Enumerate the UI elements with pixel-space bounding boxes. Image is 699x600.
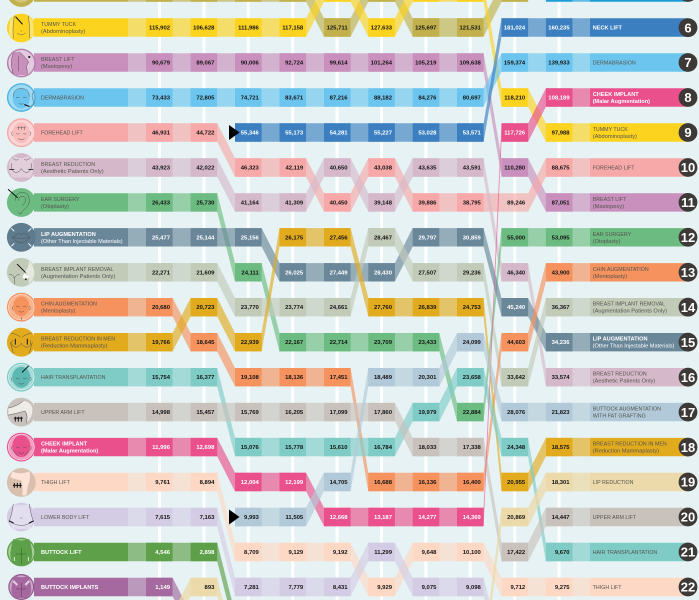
series: forehead lift: 89,246: [507, 200, 526, 206]
series: lip reduction: 893: [205, 585, 215, 591]
series: buttock augmentation with fat grafting: [229, 333, 688, 526]
series: chin augmentation: [7, 263, 688, 491]
series: breast lift: 110,280: [504, 166, 526, 172]
series: buttock augmentation with fat grafting: 24,099: [463, 340, 482, 346]
rank badges: 20: [681, 510, 695, 525]
series: buttock lift: 2,898: [200, 550, 215, 556]
series: lower body lift: 9,098: [466, 585, 482, 591]
series: forehead lift: 39,886: [418, 200, 437, 206]
series: thigh lift: [7, 468, 688, 596]
series: lower body lift: 7,281: [244, 585, 260, 591]
series: tummy tuck: 106,628: [193, 26, 215, 32]
series: dermabrasion: 139,933: [548, 60, 570, 66]
series: ear surgery: 25,730: [196, 200, 215, 206]
series: rank 5 blue label: [546, 0, 688, 2]
icon: face with dermabrasion tool: [7, 83, 36, 112]
rank badges: 18: [681, 440, 695, 455]
right label: buttock augmentation: BUTTOCK AUGMENTATION: [593, 407, 661, 413]
rank badges: [679, 0, 697, 596]
series: breast implant removal: 36,367: [552, 305, 570, 311]
right label: hair transplantation: HAIR TRANSPLANTATION: [593, 550, 657, 556]
series: breast reduction in men: 20,723: [196, 305, 215, 311]
series: dermabrasion: 83,671: [285, 96, 304, 102]
series: buttock augmentation with fat grafting: 20,301: [418, 375, 437, 381]
right label: neck lift: NECK LIFT: [593, 26, 622, 32]
series: lip augmentation: 28,430: [374, 270, 393, 276]
series: buttock implants: [8, 574, 184, 600]
right label: upper arm lift: UPPER ARM LIFT: [593, 515, 637, 521]
right label: cheek implant: (Malar Augmentation): [593, 99, 650, 105]
series: breast lift: 90,679: [152, 60, 171, 66]
series: lip augmentation: 26,025: [285, 270, 304, 276]
right label: chin augmentation: CHIN AUGMENTATION: [593, 267, 649, 273]
series: chin augmentation: 16,400: [463, 480, 482, 486]
series: breast reduction: 43,635: [418, 166, 437, 172]
series: dermabrasion: 87,216: [330, 96, 348, 102]
series: breast implant removal: 29,236: [463, 270, 482, 276]
series: cheek implant: 117,726: [504, 130, 526, 136]
rank badges: 10: [681, 160, 695, 175]
label: cheek implant: CHEEK IMPLANT: [41, 442, 88, 448]
label: lip augmentation: LIP AUGMENTATION: [41, 232, 96, 238]
series: upper arm lift: 15,457: [196, 410, 215, 416]
rank badges: 13: [681, 265, 695, 280]
icon: male chest: [7, 328, 36, 357]
series: tummy tuck: 111,986: [238, 26, 260, 32]
series: upper arm lift: 17,422: [507, 550, 526, 556]
series: lip augmentation: 45,240: [507, 305, 526, 311]
series: cheek implant: 14,277: [418, 515, 437, 521]
series: buttock augmentation with fat grafting: 18,489: [374, 375, 393, 381]
series: lip augmentation: 29,797: [418, 235, 437, 241]
series: hair transplantation: 23,658: [463, 375, 482, 381]
series: cheek implant: 12,698: [196, 445, 215, 451]
series: hair transplantation: [7, 363, 688, 561]
series: upper arm lift: 17,099: [330, 410, 348, 416]
series: lip reduction: [179, 473, 688, 600]
marker: new entry triangle: [229, 510, 240, 524]
series: lower body lift: 7,779: [288, 585, 304, 591]
series: dermabrasion: 73,433: [152, 96, 171, 102]
series: cheek implant: 11,996: [152, 445, 171, 451]
series: rank 5 olive procedure: 125,697: [415, 26, 437, 32]
label: ear surgery: (Otoplasty): [41, 204, 69, 210]
series: ear surgery: 22,884: [463, 410, 482, 416]
series: upper arm lift: 17,860: [374, 410, 393, 416]
series: chin augmentation: 19,108: [241, 375, 260, 381]
series: thigh lift: 8,894: [200, 480, 215, 486]
series: thigh lift: 10,100: [463, 550, 482, 556]
series: ear surgery: 23,709: [374, 340, 393, 346]
series: neck lift: 55,346: [241, 130, 260, 136]
series: cheek implant: 13,187: [374, 515, 393, 521]
series: hair transplantation: 15,610: [330, 445, 348, 451]
series: thigh lift: 9,192: [333, 550, 348, 556]
series: ear surgery: 53,095: [552, 235, 570, 241]
series: hair transplantation: 15,076: [241, 445, 260, 451]
label: buttock implants: BUTTOCK IMPLANTS: [41, 585, 99, 591]
rank badges: 6: [684, 20, 692, 35]
right label: tummy tuck: (Abdominoplasty): [593, 134, 637, 140]
series: chin augmentation: 18,136: [285, 375, 304, 381]
icon: ear with needle: [7, 188, 36, 217]
series: dermabrasion: 84,276: [418, 96, 437, 102]
series: breast reduction in men: [7, 228, 688, 491]
series: rank 5 olive procedure: 121,531: [460, 26, 482, 32]
series: ear surgery: 24,111: [241, 270, 260, 276]
series: chin augmentation: 43,900: [552, 270, 570, 276]
series: tummy tuck: 118,210: [504, 96, 526, 102]
series: breast reduction in men: 22,939: [241, 340, 260, 346]
label: breast implant removal: BREAST IMPLANT REMOVAL: [41, 267, 113, 273]
series: breast implant removal: 27,507: [418, 270, 437, 276]
series: lower body lift: 11,299: [374, 550, 393, 556]
series: cheek implant: [7, 88, 688, 526]
series: hair transplantation: 15,778: [285, 445, 304, 451]
label: breast implant removal: (Augmentation Patients Only): [41, 274, 115, 280]
series: dermabrasion: 88,182: [374, 96, 393, 102]
icon: torso with incision: [7, 14, 36, 42]
series: lip augmentation: 34,236: [552, 340, 570, 346]
series: upper arm lift: 16,205: [285, 410, 304, 416]
icon: lips with arrows: [7, 223, 36, 252]
right label: lip reduction: LIP REDUCTION: [593, 480, 634, 486]
series: breast implant removal: 33,642: [507, 375, 526, 381]
label: upper arm lift: UPPER ARM LIFT: [41, 410, 85, 416]
label: tummy tuck: (Abdominoplasty): [41, 29, 85, 35]
series: forehead lift: 88,675: [552, 166, 570, 172]
series: chin augmentation: 20,680: [152, 305, 171, 311]
series: hair transplantation: 15,754: [152, 375, 171, 381]
series: neck lift: 55,227: [374, 130, 393, 136]
series: neck lift: 53,028: [418, 130, 437, 136]
right label: buttock augmentation: WITH FAT GRAFTING: [593, 414, 646, 420]
right label: ear surgery: EAR SURGERY: [593, 232, 632, 238]
icon: chest with reduction marks: [7, 153, 36, 182]
series: hair transplantation: 16,784: [374, 445, 393, 451]
series: upper arm lift: [7, 398, 688, 561]
series: breast implant removal: 22,271: [152, 270, 171, 276]
right label: breast implant removal: (Augmentation Patients Only): [593, 309, 667, 315]
series: neck lift: 181,024: [504, 26, 526, 32]
series: upper arm lift: 18,033: [418, 445, 437, 451]
series: cheek implant: 12,199: [285, 480, 304, 486]
series: breast implant removal: 28,467: [374, 235, 393, 241]
series: lip reduction: 20,869: [507, 515, 526, 521]
series: upper arm lift: 15,769: [241, 410, 260, 416]
series: forehead lift: 42,119: [285, 166, 304, 172]
series: thigh lift: 9,929: [377, 585, 393, 591]
label: dermabrasion: DERMABRASION: [41, 96, 84, 102]
series: thigh lift: 9,761: [155, 480, 171, 486]
label: buttock lift: BUTTOCK LIFT: [41, 550, 82, 556]
right label: breast lift: BREAST LIFT: [593, 197, 627, 203]
series: neck lift: 55,173: [285, 130, 304, 136]
series: ear surgery: 22,167: [285, 340, 304, 346]
series: neck lift: 160,235: [548, 26, 570, 32]
label: breast reduction in men: (Reduction Mammaplasty): [41, 344, 107, 350]
series: neck lift: 54,281: [330, 130, 348, 136]
series: lower body lift: 9,075: [422, 585, 437, 591]
right label: breast lift: (Mastopexy): [593, 204, 624, 210]
series: breast lift: 90,006: [241, 60, 260, 66]
icon: upper arm: [7, 398, 36, 426]
icon: buttock implants: [8, 574, 34, 600]
label: lip augmentation: (Other Than Injectable Materials): [41, 239, 123, 245]
series: rank 5 olive procedure: [7, 0, 528, 37]
right label: forehead lift: FOREHEAD LIFT: [593, 166, 635, 172]
right label: dermabrasion: DERMABRASION: [593, 60, 636, 66]
series: breast reduction: 42,022: [196, 166, 215, 172]
series: hair transplantation: 16,377: [196, 375, 215, 381]
label: thigh lift: THIGH LIFT: [41, 480, 71, 486]
series: breast lift: 101,264: [371, 60, 393, 66]
series: breast reduction in men: 18,575: [552, 445, 570, 451]
right label: breast reduction: (Aesthetic Patients Only): [593, 379, 655, 385]
series: ear surgery: [7, 188, 688, 421]
series: thigh lift: 9,648: [422, 550, 437, 556]
series: breast implant removal: 23,774: [285, 305, 304, 311]
right label: breast implant removal: BREAST IMPLANT REMOVAL: [593, 302, 665, 308]
series: lower body lift: [7, 503, 489, 600]
series: rank 5 olive procedure: 125,711: [327, 26, 348, 32]
series: thigh lift: 9,275: [555, 585, 570, 591]
rank badges: 15: [681, 335, 695, 350]
right label: lip augmentation: LIP AUGMENTATION: [593, 337, 647, 343]
label: tummy tuck: TUMMY TUCK: [41, 22, 77, 28]
series: chin augmentation: 16,136: [418, 480, 437, 486]
series: tummy tuck: [7, 0, 688, 142]
icon: implant removal: [7, 258, 36, 287]
series: breast reduction: [7, 153, 688, 386]
label: breast reduction in men: BREAST REDUCTION IN MEN: [41, 337, 115, 343]
series: lip augmentation: 30,859: [463, 235, 482, 241]
right label: lip augmentation: (Other Than Injectable Materials): [593, 344, 675, 350]
series: breast reduction: 43,923: [152, 166, 171, 172]
series: cheek implant: 12,004: [241, 480, 260, 486]
icon: face with cheek marks: [7, 433, 36, 462]
series: breast reduction: 41,309: [285, 200, 304, 206]
series: breast reduction: 39,148: [374, 200, 393, 206]
label: chin augmentation: (Mentoplasty): [41, 309, 76, 315]
series: breast reduction: 40,650: [330, 166, 348, 172]
series: lip augmentation: 25,144: [196, 235, 215, 241]
series: tummy tuck: 117,158: [282, 26, 304, 32]
series: breast implant removal: 21,609: [196, 270, 215, 276]
series: breast lift: 109,638: [460, 60, 482, 66]
series: breast reduction in men: 27,760: [374, 305, 393, 311]
series: breast reduction in men: 19,766: [152, 340, 171, 346]
series: buttock augmentation with fat grafting: 28,076: [507, 410, 526, 416]
marker: new entry triangle: [229, 125, 240, 140]
series: breast reduction: 33,574: [552, 375, 570, 381]
series: thigh lift: 8,709: [244, 550, 260, 556]
series: chin augmentation: 17,451: [330, 375, 348, 381]
series: lip augmentation: 25,477: [152, 235, 171, 241]
series: breast reduction in men: 20,955: [507, 480, 526, 486]
series: breast implant removal: 23,770: [241, 305, 260, 311]
rank badges: 14: [681, 300, 696, 315]
series: hair transplantation: 19,979: [418, 410, 437, 416]
series: lower body lift: 7,163: [200, 515, 215, 521]
icon: face with hair graft needle: [7, 363, 36, 392]
series: hair transplantation: 9,670: [555, 550, 570, 556]
series: ear surgery: 55,000: [507, 235, 526, 241]
right label: breast reduction in men: BREAST REDUCTION IN MEN: [593, 442, 667, 448]
series: breast lift: [7, 49, 688, 212]
series: breast lift: 89,067: [196, 60, 215, 66]
series: breast lift: 105,219: [415, 60, 437, 66]
icon: thigh: [7, 468, 36, 497]
series: upper arm lift: 17,338: [463, 445, 482, 451]
series: upper arm lift: 14,447: [552, 515, 570, 521]
series: lip augmentation: 25,156: [241, 235, 260, 241]
rank badges: 12: [681, 230, 695, 245]
series: forehead lift: 43,038: [374, 166, 393, 172]
series: thigh lift: 9,129: [288, 550, 304, 556]
series: ear surgery: 23,433: [418, 340, 437, 346]
rank badges: 8: [684, 90, 692, 105]
series: forehead lift: 46,323: [241, 166, 260, 172]
series: breast reduction: 41,164: [241, 200, 260, 206]
rank badges: 11: [681, 195, 695, 210]
series: lower body lift: 8,431: [333, 585, 348, 591]
label: breast reduction: (Aesthetic Patients Only): [41, 169, 104, 175]
icon: face with chin mark: [7, 293, 36, 322]
right label: cheek implant: CHEEK IMPLANT: [593, 92, 639, 98]
series: lower body lift: 7,615: [155, 515, 171, 521]
series: forehead lift: 38,795: [463, 200, 482, 206]
series: dermabrasion: 72,805: [196, 96, 215, 102]
label: breast reduction: BREAST REDUCTION: [41, 162, 95, 168]
series: dermabrasion: 74,721: [241, 96, 260, 102]
series: neck lift: 53,571: [463, 130, 482, 136]
label: cheek implant: (Malar Augmentation): [41, 449, 98, 455]
series: breast implant removal: 24,661: [330, 305, 348, 311]
series: breast reduction: 43,591: [463, 166, 482, 172]
series: tummy tuck: 97,988: [552, 130, 570, 136]
series: thigh lift: 9,712: [510, 585, 526, 591]
series: breast reduction in men: 27,456: [330, 235, 348, 241]
right label: tummy tuck: TUMMY TUCK: [593, 127, 628, 133]
label: breast lift: (Mastopexy): [41, 64, 72, 70]
series: breast reduction in men: 24,753: [463, 305, 482, 311]
label: ear surgery: EAR SURGERY: [41, 197, 80, 203]
series: tummy tuck: 115,902: [149, 26, 171, 32]
series: breast lift: 87,051: [552, 200, 570, 206]
series: hair transplantation: 24,348: [507, 445, 526, 451]
series: lip augmentation: [7, 223, 688, 351]
series: buttock augmentation with fat grafting: 14,705: [330, 480, 348, 486]
label: hair transplantation: HAIR TRANSPLANTATION: [41, 375, 106, 381]
series: chin augmentation: 18,645: [196, 340, 215, 346]
rank badges: 21: [681, 545, 695, 560]
series: buttock lift: [7, 538, 232, 600]
right label: breast reduction: BREAST REDUCTION: [593, 372, 647, 378]
series: breast reduction in men: 26,175: [285, 235, 304, 241]
right label: breast reduction in men: (Reduction Mammaplasty): [593, 449, 659, 455]
series: dermabrasion: 159,374: [504, 60, 526, 66]
series: cheek implant: 12,668: [330, 515, 348, 521]
series: forehead lift: [7, 118, 688, 212]
label: lower body lift: LOWER BODY LIFT: [41, 515, 90, 521]
series: dermabrasion: [7, 53, 688, 112]
right label: chin augmentation: (Mentoplasty): [593, 274, 627, 280]
label: forehead lift: FOREHEAD LIFT: [41, 130, 84, 136]
series: breast lift: 92,724: [285, 60, 304, 66]
series: buttock augmentation with fat grafting: 11,505: [285, 515, 304, 521]
rank badges: 7: [684, 55, 692, 70]
icon: lower body: [7, 503, 36, 531]
series: cheek implant: 14,369: [463, 515, 482, 521]
series: ear surgery: 26,433: [152, 200, 171, 206]
right label: ear surgery: (Otoplasty): [593, 239, 621, 245]
label: chin augmentation: CHIN AUGMENTATION: [41, 302, 97, 308]
series: breast reduction in men: 26,839: [418, 305, 437, 311]
series: breast implant removal: [7, 228, 688, 386]
series: tummy tuck: 127,633: [371, 26, 393, 32]
series: ear surgery: 22,714: [330, 340, 348, 346]
series: breast reduction: 46,340: [507, 270, 526, 276]
series: upper arm lift: 14,998: [152, 410, 171, 416]
series: dermabrasion: 80,697: [463, 96, 482, 102]
rank badges: 9: [684, 125, 692, 140]
icon: breast side profile: [7, 49, 36, 77]
series: chin augmentation: 16,688: [374, 480, 393, 486]
icon: face with forehead marks: [7, 118, 36, 147]
label: breast lift: BREAST LIFT: [41, 57, 75, 63]
rank badges: 22: [681, 580, 695, 595]
rank badges: 19: [681, 475, 695, 490]
right label: thigh lift: THIGH LIFT: [593, 585, 622, 591]
series: forehead lift: 40,450: [330, 200, 348, 206]
rank badges: 17: [681, 405, 695, 420]
series: chin augmentation: 44,603: [507, 340, 526, 346]
series: breast lift: 99,614: [330, 60, 348, 66]
series: buttock augmentation with fat grafting: 9,993: [244, 515, 260, 521]
series: forehead lift: 44,722: [196, 130, 215, 136]
series: cheek implant: 108,189: [548, 96, 570, 102]
rank badges: 16: [681, 370, 695, 385]
series: lip augmentation: 27,449: [330, 270, 348, 276]
series: forehead lift: 46,931: [152, 130, 171, 136]
series: lip reduction: 18,301: [552, 480, 570, 486]
series: buttock lift: 4,546: [155, 550, 171, 556]
series: buttock implants: 1,149: [155, 585, 171, 591]
series: buttock augmentation with fat grafting: 21,823: [552, 410, 570, 416]
icon: buttocks with lift marks: [7, 538, 36, 566]
series: neck lift: [229, 18, 688, 142]
